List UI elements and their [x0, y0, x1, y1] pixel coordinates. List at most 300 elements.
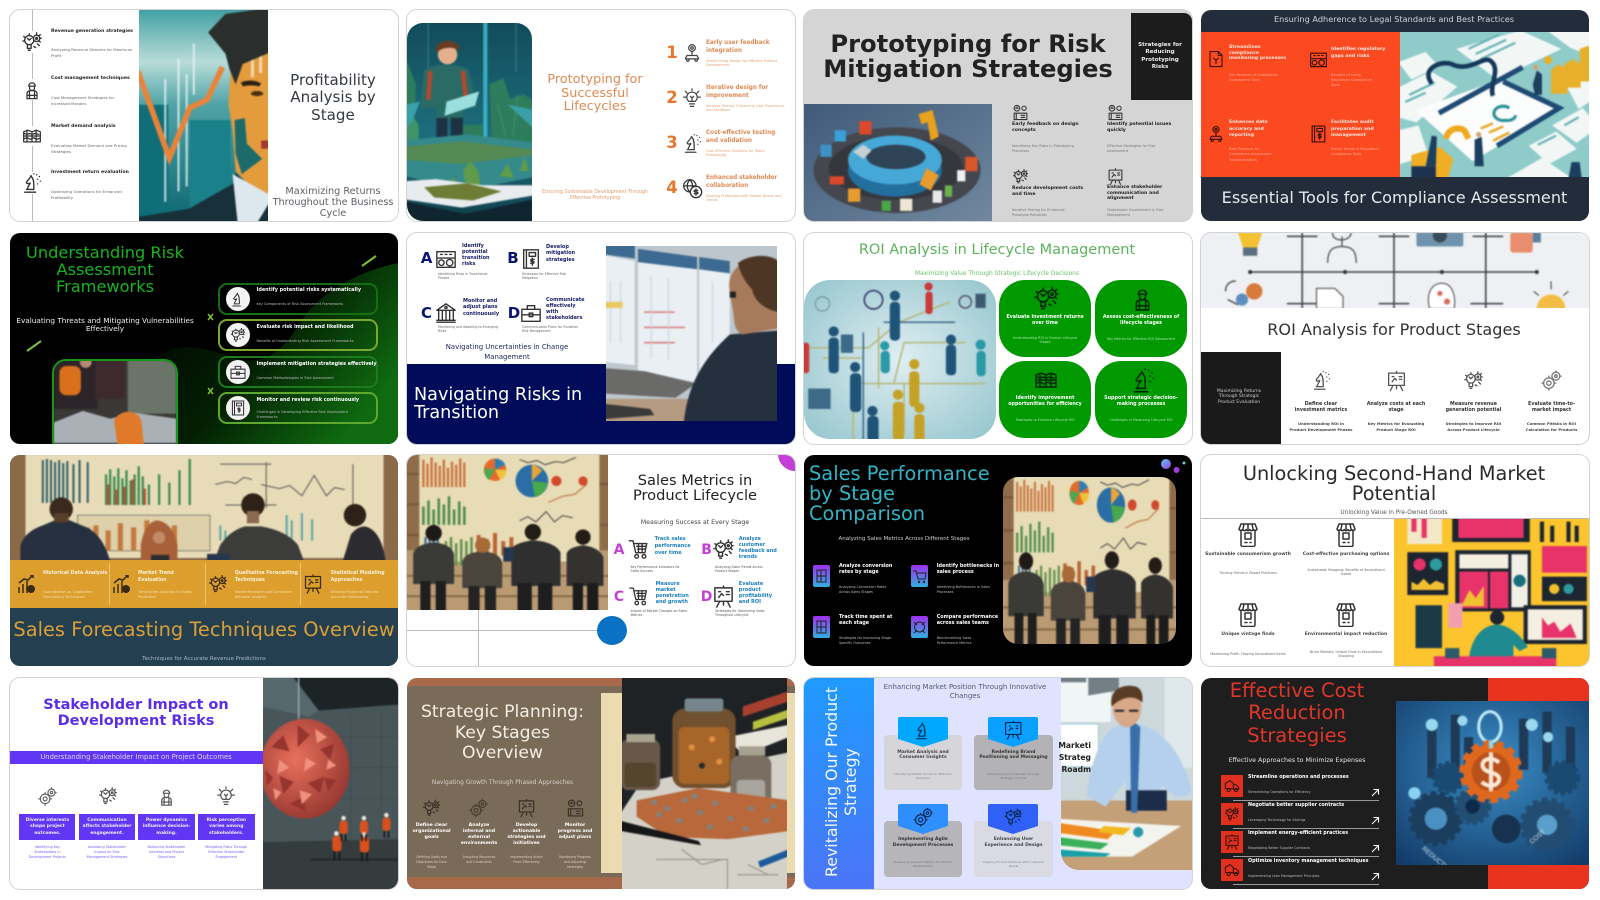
title: Navigating Risks in — [414, 384, 582, 404]
column 3 title: generation potential — [1446, 408, 1501, 413]
icon: gear — [469, 798, 488, 818]
item title: alignment — [1107, 196, 1134, 201]
card 1 title: Consumer Insights — [899, 755, 947, 760]
icon: globe money — [683, 179, 702, 198]
item title: product — [739, 587, 761, 593]
column 2 title: stage — [1388, 408, 1404, 413]
panel: sales forecasting techniques — [10, 455, 398, 666]
column 2 detail — [463, 855, 495, 865]
image: analyst at monitors — [606, 246, 776, 420]
image: team at chart wall — [10, 455, 398, 560]
card 4 text: Support strategic decision- — [1104, 396, 1178, 400]
item title: compliance — [1229, 51, 1259, 56]
item detail: Strategies — [51, 148, 71, 154]
item detail: Cost-Effective Solutions for Rapid — [706, 148, 764, 152]
item title — [706, 39, 770, 54]
card 1 detail: Identifying Market Trends for Effective — [894, 772, 952, 776]
card 2 — [218, 318, 378, 350]
column 3 title — [507, 823, 546, 847]
item detail — [522, 324, 578, 332]
column 3 detail: Plans Effectively — [513, 860, 540, 864]
icon tile 2 — [1221, 802, 1243, 824]
icon: calculator — [1310, 52, 1327, 68]
item detail: Strategies for Optimizing Sales — [715, 608, 764, 612]
icon: market — [21, 126, 43, 146]
item title — [1229, 45, 1286, 62]
column 3 title: Develop — [516, 823, 537, 828]
letter D: D — [508, 304, 520, 322]
box 1 text: shape project — [30, 824, 65, 829]
panel: second-hand market potential — [1201, 455, 1589, 666]
title: Product Lifecycle — [633, 486, 757, 504]
callout: strategies box — [1131, 13, 1192, 100]
box 2 text — [83, 818, 131, 837]
subtitle: Measuring Success at Every Stage — [641, 519, 749, 526]
title: Effective Cost — [1230, 678, 1364, 702]
item detail: Streamlining Design for Efficient Product — [706, 58, 777, 62]
item detail: Key Features of Compliance — [1229, 72, 1278, 76]
icon: gear bulb — [1012, 168, 1028, 184]
icon: calc — [435, 246, 457, 270]
item detail — [51, 94, 114, 106]
item title: strategies — [546, 257, 575, 263]
column 4 detail: Common Pitfalls in ROI — [1527, 420, 1576, 426]
item title: quickly — [1107, 128, 1126, 133]
column 3 detail — [1446, 420, 1501, 434]
item title: rates by stage — [839, 569, 879, 575]
card 4 — [974, 821, 1053, 876]
card 2 text: Assess cost-effectiveness of — [1103, 314, 1179, 320]
item title: Market demand analysis — [51, 124, 116, 129]
item title: Identify bottlenecks in — [937, 562, 999, 568]
item title: potential — [462, 249, 488, 255]
item detail — [706, 104, 784, 112]
item detail: Identifying Bottlenecks in Sales — [937, 584, 990, 588]
title: Essential Tools for Compliance Assessment — [1222, 188, 1567, 207]
subtitle: Unlocking Value in Pre-Owned Goods — [1340, 510, 1448, 516]
item title: and validation — [706, 138, 752, 144]
item title: Negotiate better supplier contracts — [1248, 803, 1344, 808]
item title: feedback and — [739, 548, 777, 554]
box 3 text: influence decision- — [143, 824, 190, 829]
column 1 detail: Product Development Phases — [1290, 427, 1352, 432]
icon: people — [1014, 104, 1028, 120]
item detail: Identifying Key Risks in Prototyping — [1012, 144, 1074, 148]
icon: cart down — [628, 585, 649, 607]
item detail: Streamlining Operations for Efficiency — [1248, 790, 1311, 794]
column 1 title: Define clear — [1305, 402, 1337, 406]
callout text: Maximizing Returns — [1217, 388, 1261, 394]
item title: mitigation — [546, 250, 575, 256]
letter B: B — [701, 542, 712, 558]
image: team at chart wall — [1002, 477, 1176, 644]
icon: chess — [1129, 366, 1157, 394]
title: Stage — [311, 106, 355, 124]
item detail — [631, 564, 680, 572]
card 4 detail — [983, 860, 1044, 868]
card 3 title: Implement mitigation strategies effectively — [256, 360, 377, 366]
image: businessman and chart — [139, 10, 268, 221]
box 3 text: Power dynamics — [146, 818, 187, 823]
item title: performance — [655, 542, 691, 548]
callout text: Through Strategic — [1219, 394, 1259, 399]
item title: Evaluate — [739, 580, 763, 586]
detail 4: Effective Stakeholder — [208, 850, 244, 854]
title: Transition — [414, 402, 499, 422]
item detail: Trends — [706, 198, 717, 202]
card 1 detail: Understanding ROI in Product Lifecycle — [1013, 336, 1077, 340]
subtitle: Ensuring Adherence to Legal Standards and Best Practices — [1274, 14, 1514, 24]
item detail: Specific Outcomes — [839, 641, 871, 645]
card 2 detail: Enhancing Core Expertise Through — [987, 772, 1040, 776]
item title: market — [656, 587, 676, 593]
callout text: Product Evaluation — [1218, 400, 1260, 404]
detail 3: Balancing Stakeholder — [147, 844, 186, 848]
item title: Market Trend — [138, 571, 174, 576]
item title: sales process — [937, 569, 974, 575]
item detail: Profit — [51, 53, 61, 58]
item detail: Cost Management Strategies for — [51, 94, 114, 100]
card 3 — [999, 360, 1091, 438]
image label text — [1058, 740, 1091, 776]
subtitle: Cycle — [320, 208, 346, 219]
card 3 — [884, 821, 962, 876]
icon: robot — [684, 44, 700, 62]
decor dots — [804, 455, 1192, 666]
icon: store 3 — [1238, 603, 1258, 627]
title: Sales Performance — [809, 462, 990, 484]
subtitle: Navigating Uncertainties in Change — [446, 343, 568, 351]
item title — [739, 580, 772, 605]
item title: and growth — [656, 599, 688, 605]
item title — [839, 562, 892, 576]
item title: Early user feedback — [706, 40, 770, 46]
column 1 detail: Objectives for Each — [416, 860, 447, 864]
tag 2 — [988, 716, 1038, 746]
item title: trends — [739, 554, 757, 560]
icon: hand — [157, 786, 176, 806]
item title — [1107, 122, 1172, 133]
item detail: Prototype Reliability — [1012, 213, 1047, 217]
number 3: 3 — [666, 133, 678, 152]
item detail: Compliance Assessment — [1229, 152, 1272, 156]
subtitle: Effective Approaches to Minimize Expenses — [1229, 756, 1365, 764]
item detail: Effective Strategies for Risk — [1107, 144, 1156, 148]
item detail — [631, 608, 687, 616]
icon tile 3 — [813, 616, 830, 638]
bottom band — [407, 876, 795, 888]
box 1 — [19, 814, 75, 840]
icon: board — [1108, 168, 1122, 185]
number 4: 4 — [666, 178, 678, 197]
item detail: Implementation — [1229, 158, 1257, 162]
icon: board — [1386, 370, 1407, 392]
icon: cost — [22, 79, 42, 100]
number 1: 1 — [666, 43, 678, 62]
item title — [1229, 120, 1268, 140]
item title: improvement — [706, 93, 749, 99]
subtitle: Management — [484, 352, 530, 360]
subtitle: Navigating Growth Through Phased Approaches — [432, 780, 573, 786]
title: Lifecycles — [564, 99, 626, 114]
icon: people — [566, 798, 585, 818]
card 1 text: over time — [1032, 321, 1058, 326]
item detail — [706, 194, 782, 202]
icon: cart — [627, 538, 650, 560]
title: Understanding Risk — [26, 243, 184, 262]
panel: navigating risks in transition — [407, 232, 795, 444]
image: man with roadmap — [1061, 678, 1192, 870]
icon tile 4 — [911, 616, 928, 638]
item title: and ROI — [739, 599, 761, 605]
item title: monitoring processes — [1229, 56, 1286, 61]
title: Reduction — [1248, 701, 1346, 724]
icon tile 4 — [1221, 858, 1243, 880]
item title: profitability — [739, 593, 772, 599]
title: Mitigation Strategies — [823, 54, 1113, 82]
item title: Analyze — [739, 536, 761, 542]
detail 3: Interests and Project — [149, 850, 184, 854]
column 2 detail: Analyzing Resources — [463, 855, 495, 859]
item title: Compare performance — [937, 614, 998, 620]
title — [1243, 464, 1545, 504]
callout text: Prototyping — [1141, 57, 1179, 63]
item detail — [235, 590, 292, 600]
item title: Enhance stakeholder — [1107, 185, 1162, 190]
subtitle: Effectively — [86, 324, 124, 333]
title: Overview — [462, 743, 543, 763]
column 2 detail: Product Stage ROI — [1376, 427, 1416, 432]
column 4 detail: Calculation for Products — [1526, 427, 1577, 432]
item title: Sustainable consumerism growth — [1205, 552, 1291, 556]
item detail: Tools — [1331, 83, 1340, 87]
callout: black box — [1201, 352, 1281, 444]
box 4 text: varies among — [209, 824, 243, 829]
box 2 text: engagement. — [90, 831, 124, 836]
arrow — [1370, 816, 1380, 824]
box 3 text — [143, 818, 190, 837]
item detail: Goods — [1341, 572, 1351, 576]
panel: ROI analysis for product stages — [1201, 232, 1589, 444]
item title — [1331, 120, 1374, 140]
item detail: Management — [1107, 213, 1130, 217]
icon tile 1 — [1221, 774, 1243, 796]
arrow — [1370, 788, 1380, 796]
item title — [1331, 46, 1385, 60]
item detail — [937, 584, 990, 595]
item title: each stage — [839, 620, 869, 626]
panel: risk assessment frameworks — [10, 232, 398, 444]
item detail: Throughout Lifecycle — [715, 612, 748, 616]
item detail — [522, 272, 566, 280]
item detail: Processes — [1012, 149, 1029, 153]
title — [809, 464, 990, 524]
item detail — [51, 47, 132, 58]
panel: sales performance by stage — [804, 455, 1192, 666]
column 4 title — [558, 823, 592, 841]
item detail: Compliance Tools — [1331, 152, 1361, 156]
image: blue gears — [1396, 700, 1589, 865]
column 2 title: Analyze costs at each — [1367, 402, 1425, 406]
column 1 title — [1295, 402, 1347, 415]
item title: Optimize inventory management techniques — [1248, 859, 1368, 864]
item detail: Assessment — [1107, 149, 1128, 153]
image label text: Marketi — [1058, 740, 1091, 750]
item title: and time — [1012, 192, 1035, 197]
arrow — [1370, 844, 1380, 852]
icon: store 1 — [1238, 523, 1258, 547]
box 4 — [198, 814, 255, 840]
title — [1230, 680, 1364, 747]
item title: Approaches — [331, 578, 362, 583]
item title — [839, 614, 892, 626]
item title: Communicate — [546, 297, 584, 303]
item detail: Sales Success — [631, 568, 653, 572]
item detail: Leveraging Technology for Savings — [1248, 818, 1305, 822]
item title — [706, 129, 775, 144]
column 4 detail: Monitoring Progress — [559, 855, 591, 859]
image: people network — [804, 280, 996, 438]
card 4 text — [1104, 396, 1178, 408]
tag 3 — [898, 804, 948, 834]
item title: Techniques — [235, 578, 265, 583]
item detail: Monitoring and Adapting to Emerging — [438, 324, 498, 328]
purple corner shape — [778, 437, 812, 471]
detail 2 — [87, 844, 127, 861]
column 4 detail — [1526, 420, 1577, 434]
item title — [706, 174, 778, 189]
tag 4 — [988, 804, 1038, 834]
box 1 text: outcomes. — [34, 831, 61, 836]
side bar — [804, 678, 874, 888]
icon tile 2 — [911, 565, 928, 587]
item title: communication and — [1107, 191, 1159, 196]
item title: concepts — [1012, 128, 1036, 133]
decor lines — [407, 630, 612, 631]
card 3 detail: Revitalization — [913, 864, 933, 868]
box 1 text — [26, 818, 69, 837]
item title — [235, 571, 298, 584]
item detail — [1012, 208, 1064, 217]
item title: continuously — [463, 311, 499, 317]
icon: revenue — [21, 31, 43, 53]
card 2 — [1095, 280, 1187, 356]
icon: bank — [435, 300, 457, 324]
item detail: Thriving Trends in Resale Platforms — [1219, 570, 1277, 574]
item detail: Communication Plans for Transition — [522, 324, 578, 328]
box 4 text — [206, 818, 246, 837]
band: subtitle — [10, 750, 263, 764]
title: Sales Forecasting Techniques Overview — [13, 618, 395, 641]
item title: Measure — [656, 580, 680, 586]
column 2 title — [1367, 402, 1425, 415]
card 1 — [999, 280, 1091, 356]
card 2 detail: Benefits of Implementing Risk Assessment Frameworks — [256, 338, 354, 342]
item detail: Risk Management — [522, 328, 551, 332]
card 4 detail: Needs — [1009, 864, 1018, 868]
subtitle: Analyzing Sales Metrics Across Different Stages — [839, 536, 969, 542]
card 4 detail: Challenges in Developing Effective Risk Assessment — [256, 410, 348, 414]
item detail: Future Trends in Regulatory — [1331, 146, 1379, 150]
item title: customer — [739, 542, 765, 548]
card 3 text — [1008, 396, 1082, 408]
title: Potential — [1352, 482, 1436, 505]
column 3 detail: Across Product Lifecycle — [1447, 427, 1500, 432]
card 2 — [974, 734, 1053, 790]
item detail — [1310, 650, 1382, 658]
card 4 detail: Aligning Product Features with Customer — [983, 860, 1044, 864]
subtitle — [16, 316, 194, 334]
icon: gear — [1541, 368, 1562, 392]
title: Profitability — [290, 71, 376, 89]
subtitle — [884, 683, 1046, 700]
title: Strategic Planning: — [421, 702, 584, 722]
cream panel — [600, 692, 795, 872]
item detail: Prediction — [138, 594, 156, 598]
subtitle: Changes — [950, 692, 980, 700]
item detail — [1331, 146, 1379, 158]
item title: Environmental impact reduction — [1305, 632, 1387, 637]
column 3 title: strategies and — [507, 835, 546, 840]
column 4 title: progress and — [558, 829, 592, 834]
item detail: Aligning Prototypes with Market Needs and — [706, 194, 781, 198]
card 3 — [218, 356, 378, 388]
item detail: Benefits of Using — [1331, 72, 1361, 76]
item detail: Mitigation — [522, 276, 538, 280]
item title: over time — [655, 550, 682, 556]
column 4 title: Evaluate time-to- — [1528, 402, 1575, 406]
item title — [463, 298, 499, 318]
navy band — [407, 364, 795, 444]
detail 4: Mitigating Risks Through — [205, 844, 247, 848]
title: Stakeholder Impact on — [43, 697, 229, 713]
item title — [331, 571, 385, 584]
card 4 title — [984, 837, 1043, 849]
callout text — [1217, 388, 1261, 405]
item detail — [1107, 208, 1164, 217]
icon: chess — [1311, 368, 1332, 392]
item title: Monitor and — [463, 298, 497, 304]
icon: board — [303, 574, 323, 594]
item detail: Metrics — [631, 612, 642, 616]
box 3 — [138, 814, 195, 840]
item detail: Market Research and Consumer — [235, 590, 292, 594]
item detail: Forecasting Techniques — [43, 594, 85, 598]
item detail: Strategies for Effective Risk — [522, 272, 566, 276]
column 2 title: environments — [461, 841, 497, 846]
card 1 — [884, 734, 962, 790]
item title: gaps and risks — [1331, 54, 1369, 58]
item detail — [438, 324, 498, 332]
card 2 detail — [987, 772, 1040, 781]
card 1 detail: Revamps — [916, 776, 930, 780]
item title: Qualitative Forecasting — [235, 571, 298, 576]
item detail: Product Stages — [715, 568, 739, 572]
item title: Evaluation — [138, 578, 167, 583]
item detail — [1307, 568, 1385, 576]
title — [823, 30, 1113, 82]
detail 1: Identifying Key — [35, 844, 60, 848]
item detail: Benchmarking Sales — [937, 636, 971, 640]
card 1 — [218, 282, 378, 314]
item detail — [715, 608, 764, 616]
item detail: Regulatory Compliance — [1331, 78, 1372, 82]
subtitle — [542, 189, 648, 201]
card 2 title — [979, 750, 1048, 761]
item detail: and Feedback — [706, 108, 730, 112]
column 1 detail: Understanding ROI in — [1298, 420, 1344, 426]
column 2 detail: Key Metrics for Evaluating — [1368, 420, 1424, 426]
